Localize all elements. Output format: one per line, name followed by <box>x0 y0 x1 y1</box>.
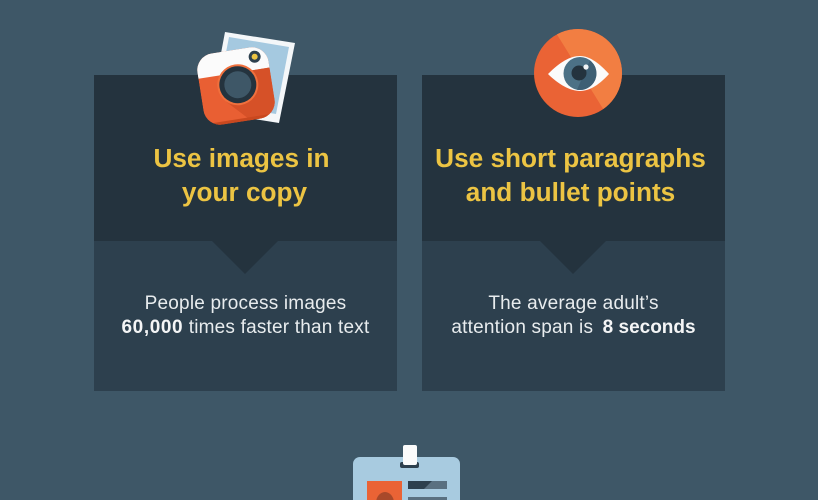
body text: images: People process images <box>145 293 346 314</box>
heading: short paragraphs: Use short paragraphs <box>435 143 706 173</box>
panel header: use images <box>94 75 397 241</box>
body text: attention span: attention span is 8 seconds <box>451 317 696 338</box>
heading: short paragraphs: and bullet points <box>466 177 675 207</box>
heading: use images: Use images in <box>153 143 330 173</box>
body text: attention span <box>451 293 696 338</box>
pointer triangle <box>540 241 606 274</box>
body text: attention span: The average adult’s <box>488 293 659 314</box>
icon: camera and photo <box>197 32 295 125</box>
body text: images: 60,000 times faster than text <box>122 317 369 338</box>
icon: eye <box>534 29 622 117</box>
pointer triangle <box>212 241 278 274</box>
heading: use images: your copy <box>182 177 307 207</box>
body text: images <box>122 293 370 338</box>
heading: use images <box>153 143 330 207</box>
heading: short paragraphs <box>435 143 706 207</box>
panel: short paragraphs <box>422 75 725 391</box>
panel: use images <box>94 75 397 391</box>
panel header: short paragraphs <box>422 75 725 241</box>
